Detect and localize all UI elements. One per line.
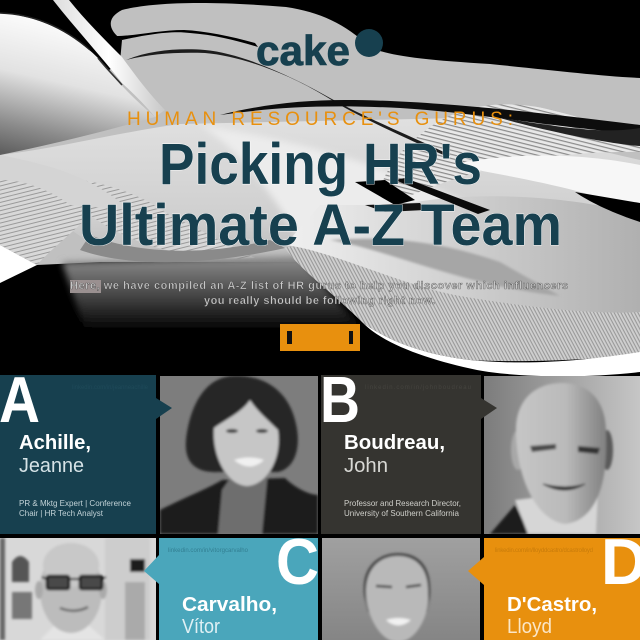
panel: B - Boudreau, John: University of Southern California — [344, 508, 459, 518]
panel: D - D'Castro, Lloyd: Lloyd — [507, 615, 552, 638]
panel: B - Boudreau, John: B — [320, 363, 360, 436]
panel: C - Carvalho, Vitor: Carvalho, — [182, 593, 277, 616]
hero background: abstract grey waves on black — [0, 0, 640, 376]
panel: D - D'Castro, Lloyd: linkedin.com/in/lloyddcastro/dcastrolloyd — [495, 548, 593, 554]
panel: B - Boudreau, John — [320, 363, 497, 534]
portrait: Lloyd D'Castro — [322, 538, 480, 640]
call to action button — [280, 324, 360, 351]
panel: D - D'Castro, Lloyd: D'Castro, — [507, 593, 597, 616]
panel: A - Achille, Jeanne: Jeanne — [19, 454, 84, 477]
panel: B - Boudreau, John: John — [344, 454, 388, 477]
panel: A - Achille, Jeanne: PR & Mktg Expert | Conference — [19, 498, 131, 508]
panel: C - Carvalho, Vitor — [144, 525, 319, 640]
panel: B - Boudreau, John: linkedin.com/in/johnboudreau — [365, 385, 471, 391]
panel: C - Carvalho, Vitor: linkedin.com/in/vitorgcarvalho — [168, 548, 249, 554]
intro text: Here, we have compiled an A-Z list of HR gurus to help you discover which influencers — [70, 280, 568, 292]
panel: C - Carvalho, Vitor: Vítor — [182, 615, 220, 638]
panel: A - Achille, Jeanne: linkedin.com/in/jeanneachille — [72, 385, 149, 391]
panel: C - Carvalho, Vitor: C — [276, 525, 319, 598]
portrait: Vitor Carvalho — [0, 538, 156, 640]
portrait: John Boudreau — [484, 376, 640, 534]
main title — [79, 132, 562, 258]
main title: Ultimate A-Z Team — [79, 193, 562, 258]
panel: B - Boudreau, John: Professor and Research Director, — [344, 498, 461, 508]
panel: A - Achille, Jeanne: Achille, — [19, 431, 91, 454]
intro text: you really should be following right now. — [204, 295, 435, 307]
brand logo: cake: cake — [256, 27, 350, 74]
panel: A - Achille, Jeanne — [0, 363, 172, 534]
portrait: Jeanne Achille — [160, 376, 318, 534]
main title: Picking HR's — [159, 132, 482, 197]
panel: A - Achille, Jeanne: Chair | HR Tech Analyst — [19, 508, 104, 518]
intro text — [70, 280, 568, 307]
panel: B - Boudreau, John: Boudreau, — [344, 431, 445, 454]
panel: D - D'Castro, Lloyd — [468, 525, 640, 640]
eyebrow heading: HUMAN RESOURCE'S GURUS: — [127, 109, 513, 130]
panel: A - Achille, Jeanne: A — [0, 363, 40, 436]
